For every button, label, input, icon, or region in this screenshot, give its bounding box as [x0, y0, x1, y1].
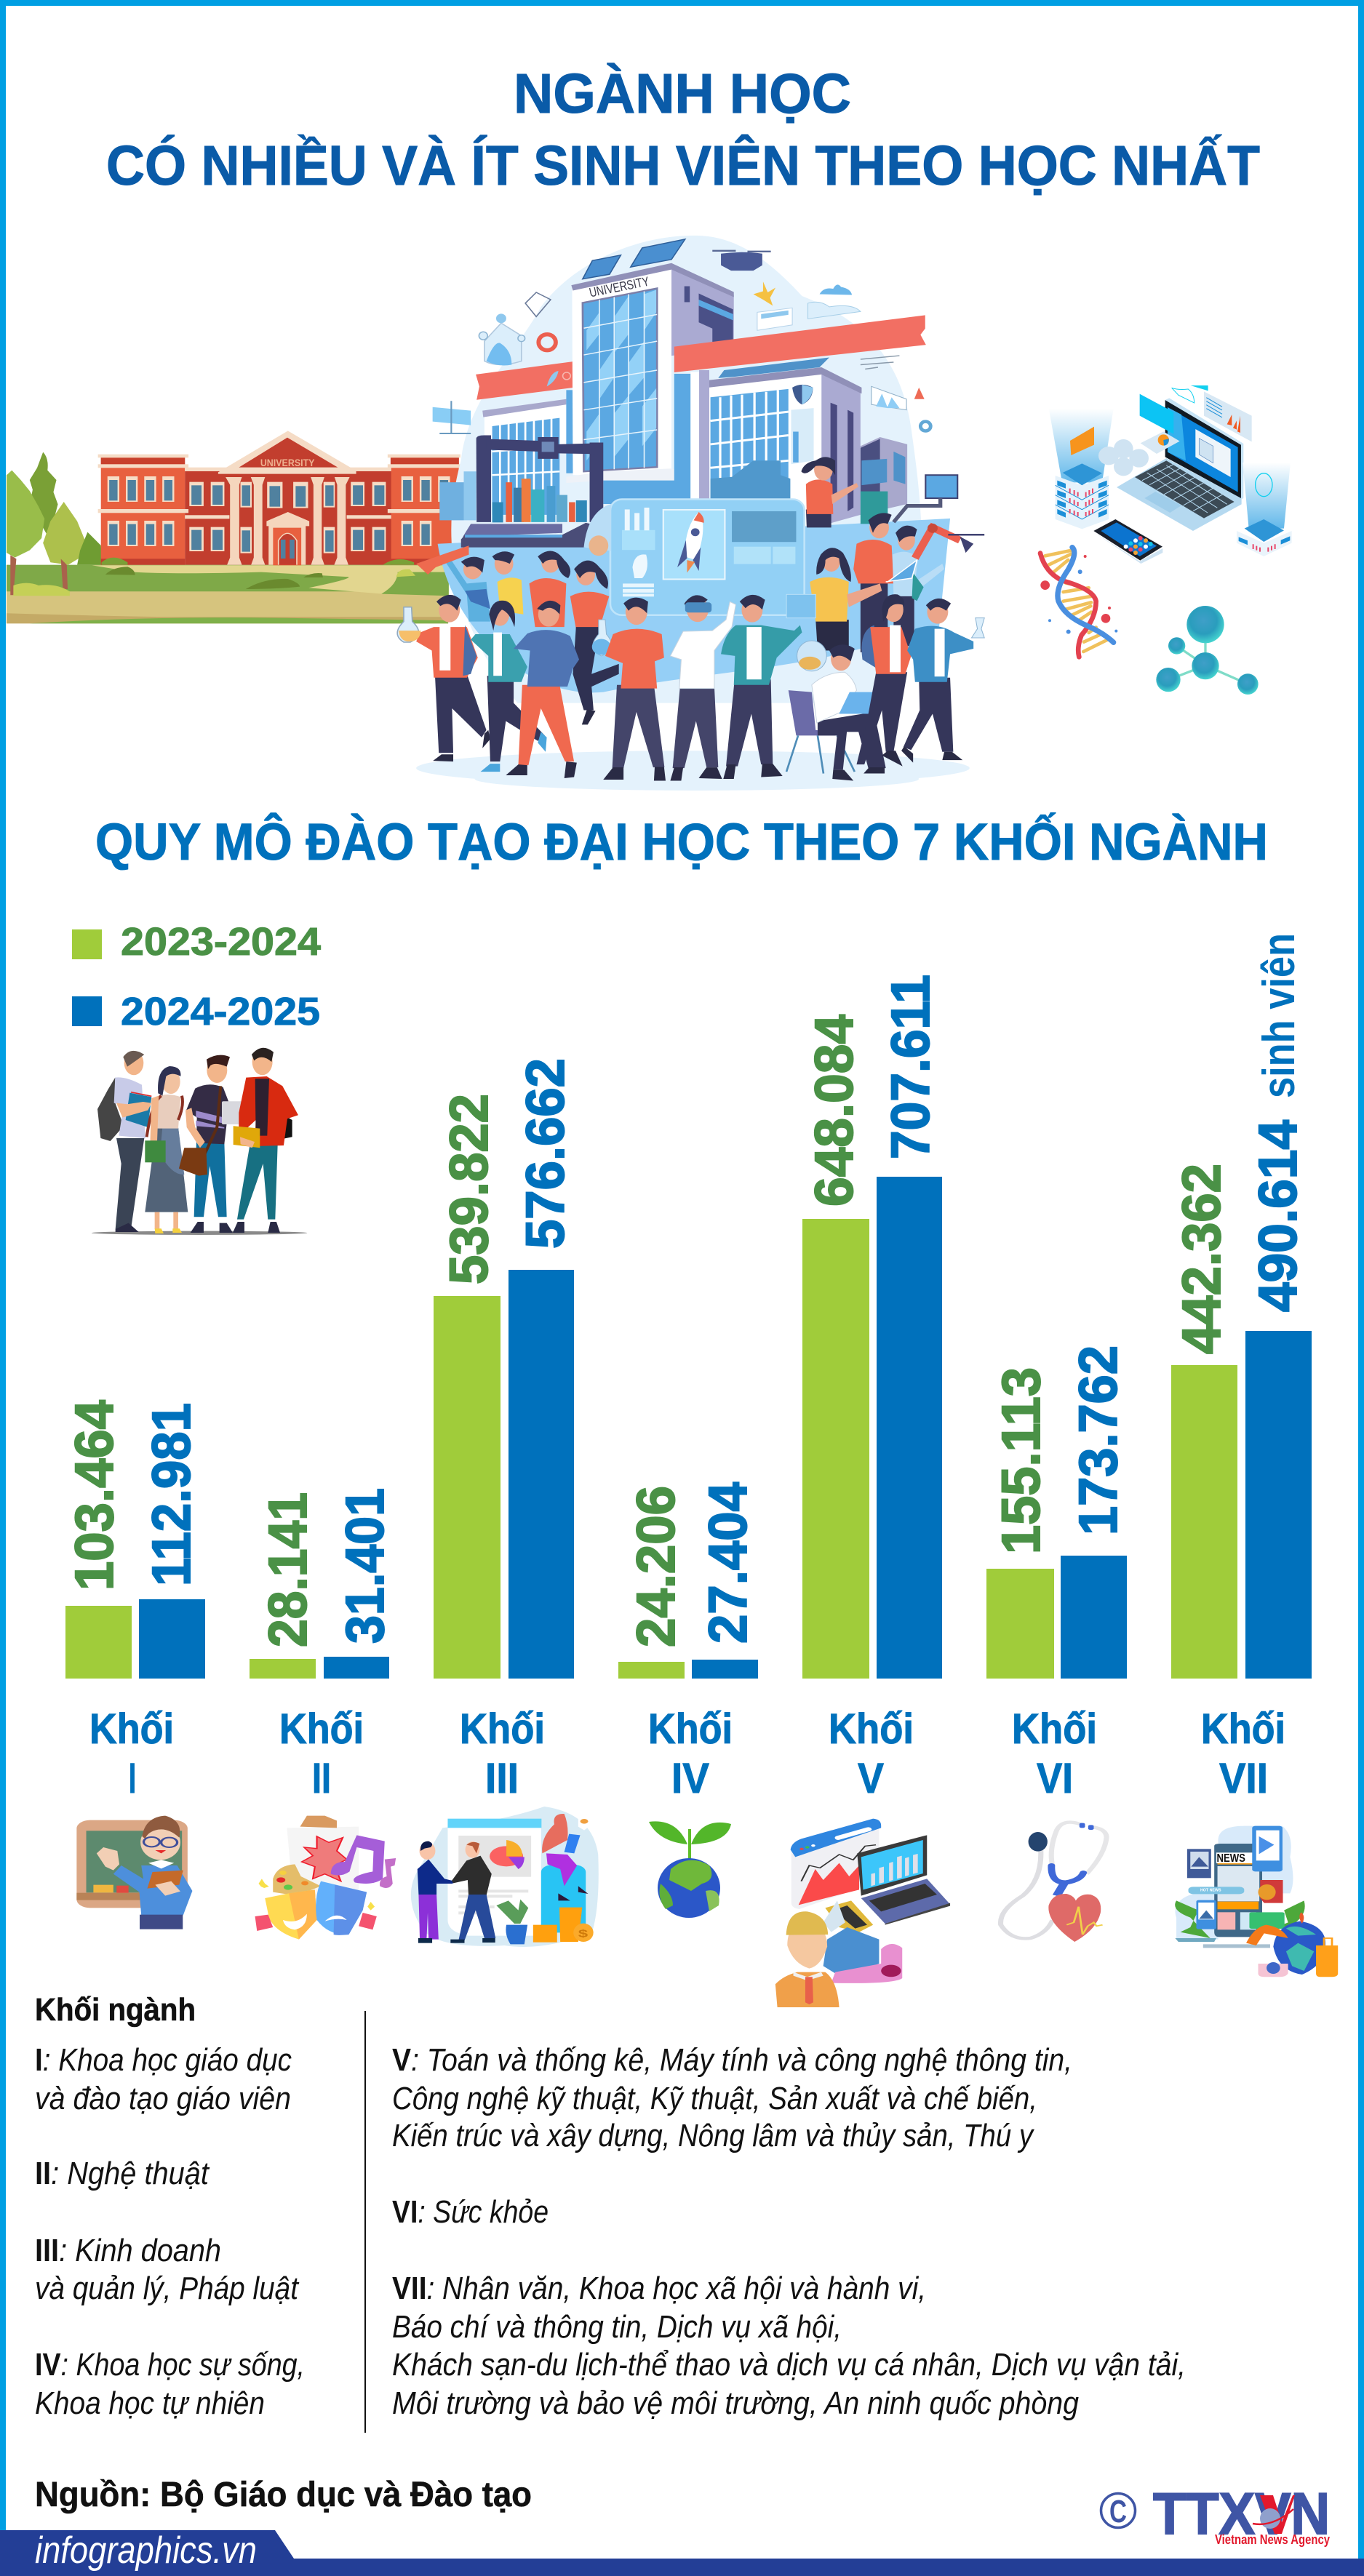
- icon: news, media and travel: NEWS: [1216, 1852, 1245, 1865]
- wings and centre: [101, 457, 185, 565]
- bars: group VI: [986, 1556, 1127, 1679]
- server stack: [1056, 476, 1109, 529]
- legend: 2024-2025: [121, 990, 320, 1033]
- value labels 2024-2025: 576.662: [515, 1058, 575, 1249]
- TTXVN logo: TTXVN: [1153, 2481, 1330, 2547]
- icon: business handshake and finance: [411, 1807, 599, 1947]
- robot arm right: [915, 527, 960, 559]
- left column text: Khoa học tự nhiên: [35, 2385, 265, 2421]
- panel heading: Khối ngành: [35, 1992, 196, 2028]
- icon: news, media and travel: HOT NEWS: [1200, 1888, 1221, 1892]
- value labels 2023-2024: 648.084: [804, 1015, 864, 1207]
- category labels: [89, 1705, 1285, 1802]
- left column text: và đào tạo giáo viên: [35, 2081, 291, 2116]
- person: back group left: [416, 545, 619, 724]
- value labels 2024-2025: 31.401: [335, 1488, 395, 1644]
- person: man in blue jacket: [901, 599, 984, 763]
- category labels: VII: [1219, 1755, 1268, 1802]
- footer bar: infographics.vn: [35, 2529, 257, 2572]
- person: seated man with laptop: [786, 644, 886, 781]
- solar panels: [583, 255, 621, 279]
- person: woman with orange jacket and backpack: [856, 594, 911, 767]
- person: man with VR headset: [670, 595, 735, 781]
- person: orange shirt man back right: [853, 513, 893, 652]
- footer bar: [0, 2529, 1364, 2576]
- bars: group I: [65, 1599, 205, 1679]
- source: Nguồn: Bộ Giáo dục và Đào tạo: [35, 2476, 532, 2514]
- phone: [1093, 519, 1162, 561]
- category labels: Khối: [89, 1705, 174, 1753]
- category labels: Khối: [648, 1705, 733, 1753]
- person: man in orange jacket with flask: [397, 595, 490, 761]
- category labels: VI: [1037, 1755, 1073, 1802]
- value labels 2024-2025: 112.981: [141, 1403, 202, 1586]
- bar chart: [64, 933, 1312, 1679]
- right column text: V: Toán và thống kê, Máy tính và công nghệ thông tin,: [392, 2042, 1072, 2078]
- value labels 2023-2024: 103.464: [64, 1400, 124, 1591]
- person: light blue shirt with tablet: [886, 526, 944, 649]
- illustration: group of students: [92, 1048, 307, 1235]
- illustration: DNA helix: [1040, 548, 1117, 657]
- university sign: UNIVERSITY: [588, 273, 650, 300]
- title: CÓ NHIỀU VÀ ÍT SINH VIÊN THEO HỌC NHẤT: [106, 133, 1260, 197]
- category labels: Khối: [279, 1705, 364, 1753]
- value labels 2023-2024: 28.141: [258, 1492, 318, 1647]
- category labels: IV: [671, 1755, 709, 1802]
- value labels 2024-2025: 173.762: [1068, 1345, 1128, 1535]
- large screen: [610, 500, 805, 615]
- legend: 2023-2024: [121, 920, 321, 964]
- illustration: molecule: [1156, 606, 1259, 695]
- right building: [861, 437, 907, 515]
- left column text: và quản lý, Pháp luật: [35, 2271, 300, 2306]
- unit label: sinh viên: [1254, 933, 1304, 1098]
- left column text: III: Kinh doanh: [35, 2233, 221, 2268]
- database cylinders: [1098, 439, 1149, 476]
- columns: [226, 477, 350, 565]
- person: man in red t-shirt: [603, 598, 666, 781]
- student 4 man in red jacket: [233, 1048, 298, 1233]
- title: [106, 62, 1260, 197]
- bars: group II: [250, 1657, 389, 1679]
- icon: data, laptop and engineer: [775, 1819, 950, 2007]
- engineer: [823, 1927, 879, 1978]
- right column text: Khách sạn-du lịch-thể thao và dịch vụ cá nhân, Dịch vụ vận tải,: [392, 2347, 1186, 2383]
- small room scene right: [861, 492, 888, 524]
- illustration: modern university, robots and students: [397, 236, 984, 791]
- person: woman in teal jacket: [471, 601, 547, 772]
- icon: stethoscope and heart: [1001, 1823, 1106, 1942]
- value labels 2024-2025: 707.611: [880, 975, 941, 1159]
- value labels 2024-2025: 27.404: [698, 1482, 758, 1644]
- category labels: Khối: [829, 1705, 914, 1753]
- right column text: VII: Nhân văn, Khoa học xã hội và hành vi,: [392, 2271, 926, 2306]
- category labels: Khối: [1201, 1705, 1285, 1753]
- left column text: IV: Khoa học sự sống,: [35, 2347, 305, 2383]
- icon: teacher at blackboard: [76, 1816, 192, 1929]
- left wing: [484, 402, 566, 449]
- person: woman on building: [801, 457, 858, 527]
- category labels: Khối: [1012, 1705, 1097, 1753]
- low city blocks: [439, 482, 463, 520]
- student 3 man with bag: [179, 1055, 252, 1233]
- bars: group V: [802, 1177, 942, 1679]
- icon: news, media and travel: [1175, 1826, 1338, 1977]
- value labels 2023-2024: 442.362: [1171, 1164, 1232, 1354]
- category labels: I: [129, 1755, 136, 1802]
- category labels: II: [312, 1755, 331, 1802]
- left column text: [35, 2042, 305, 2421]
- background blob: [451, 236, 922, 703]
- person: yellow shirt woman: [786, 548, 882, 650]
- data beam right: [1243, 463, 1291, 529]
- icon: business handshake and finance: $: [578, 1928, 588, 1940]
- bars: group III: [434, 1270, 574, 1679]
- illustration: laptop, servers and phone: [1049, 385, 1292, 564]
- explanation panel: [35, 1992, 1186, 2433]
- bars: group IV: [618, 1660, 758, 1679]
- value labels 2024-2025: 490.614: [1248, 1120, 1308, 1312]
- category labels: Khối: [460, 1705, 545, 1753]
- left column text: II: Nghệ thuật: [35, 2156, 210, 2191]
- data beam left: [1049, 409, 1114, 482]
- right column text: VI: Sức khỏe: [392, 2194, 549, 2230]
- icon: arts masks and music: [255, 1816, 396, 1940]
- TTXVN logo: Vietnam News Agency: [1215, 2532, 1330, 2547]
- right banner: [674, 315, 926, 372]
- value labels 2023-2024: 539.822: [439, 1094, 499, 1284]
- floating panels: [1140, 394, 1173, 434]
- left banner: [476, 361, 574, 400]
- icon: earth with sprout: [649, 1821, 731, 1918]
- category labels: III: [485, 1755, 519, 1802]
- bars: group VII: [1171, 1331, 1312, 1679]
- laptop: [1117, 458, 1242, 531]
- left column text: I: Khoa học giáo dục: [35, 2042, 292, 2078]
- TTXVN logo: C: [1109, 2494, 1127, 2529]
- person: man in teal jacket: [721, 595, 826, 779]
- person: man in blue sweater, orange pants: [506, 601, 579, 778]
- subtitle: QUY MÔ ĐÀO TẠO ĐẠI HỌC THEO 7 KHỐI NGÀNH: [95, 813, 1268, 871]
- rocket: [685, 512, 703, 560]
- value labels 2023-2024: 155.113: [991, 1367, 1051, 1554]
- illustration: red brick university building and lawn: [7, 431, 460, 623]
- right column text: Môi trường và bảo vệ môi trường, An ninh quốc phòng: [392, 2385, 1079, 2421]
- category labels: V: [858, 1755, 884, 1802]
- illustration: red brick university building and lawn: UNIVERSITY: [260, 457, 314, 469]
- gantry robot: [476, 435, 491, 522]
- legend: [72, 920, 321, 1033]
- value labels 2024-2025: [141, 975, 1308, 1644]
- student 2 woman: [145, 1066, 188, 1233]
- right wing: [709, 368, 821, 526]
- small icons: [754, 281, 775, 305]
- value labels 2023-2024: [64, 1015, 1232, 1647]
- right column text: [392, 2042, 1186, 2421]
- right column text: Công nghệ kỹ thuật, Kỹ thuật, Sản xuất và chế biến,: [392, 2081, 1037, 2116]
- student 1 with backpack: [97, 1051, 151, 1232]
- right column text: Báo chí và thông tin, Dịch vụ xã hội,: [392, 2309, 842, 2345]
- windows: [108, 476, 450, 553]
- value labels 2023-2024: 24.206: [626, 1486, 686, 1647]
- title: NGÀNH HỌC: [514, 62, 851, 125]
- main tower: [572, 265, 671, 475]
- right column text: Kiến trúc và xây dựng, Nông lâm và thủy sản, Thú y: [392, 2118, 1035, 2153]
